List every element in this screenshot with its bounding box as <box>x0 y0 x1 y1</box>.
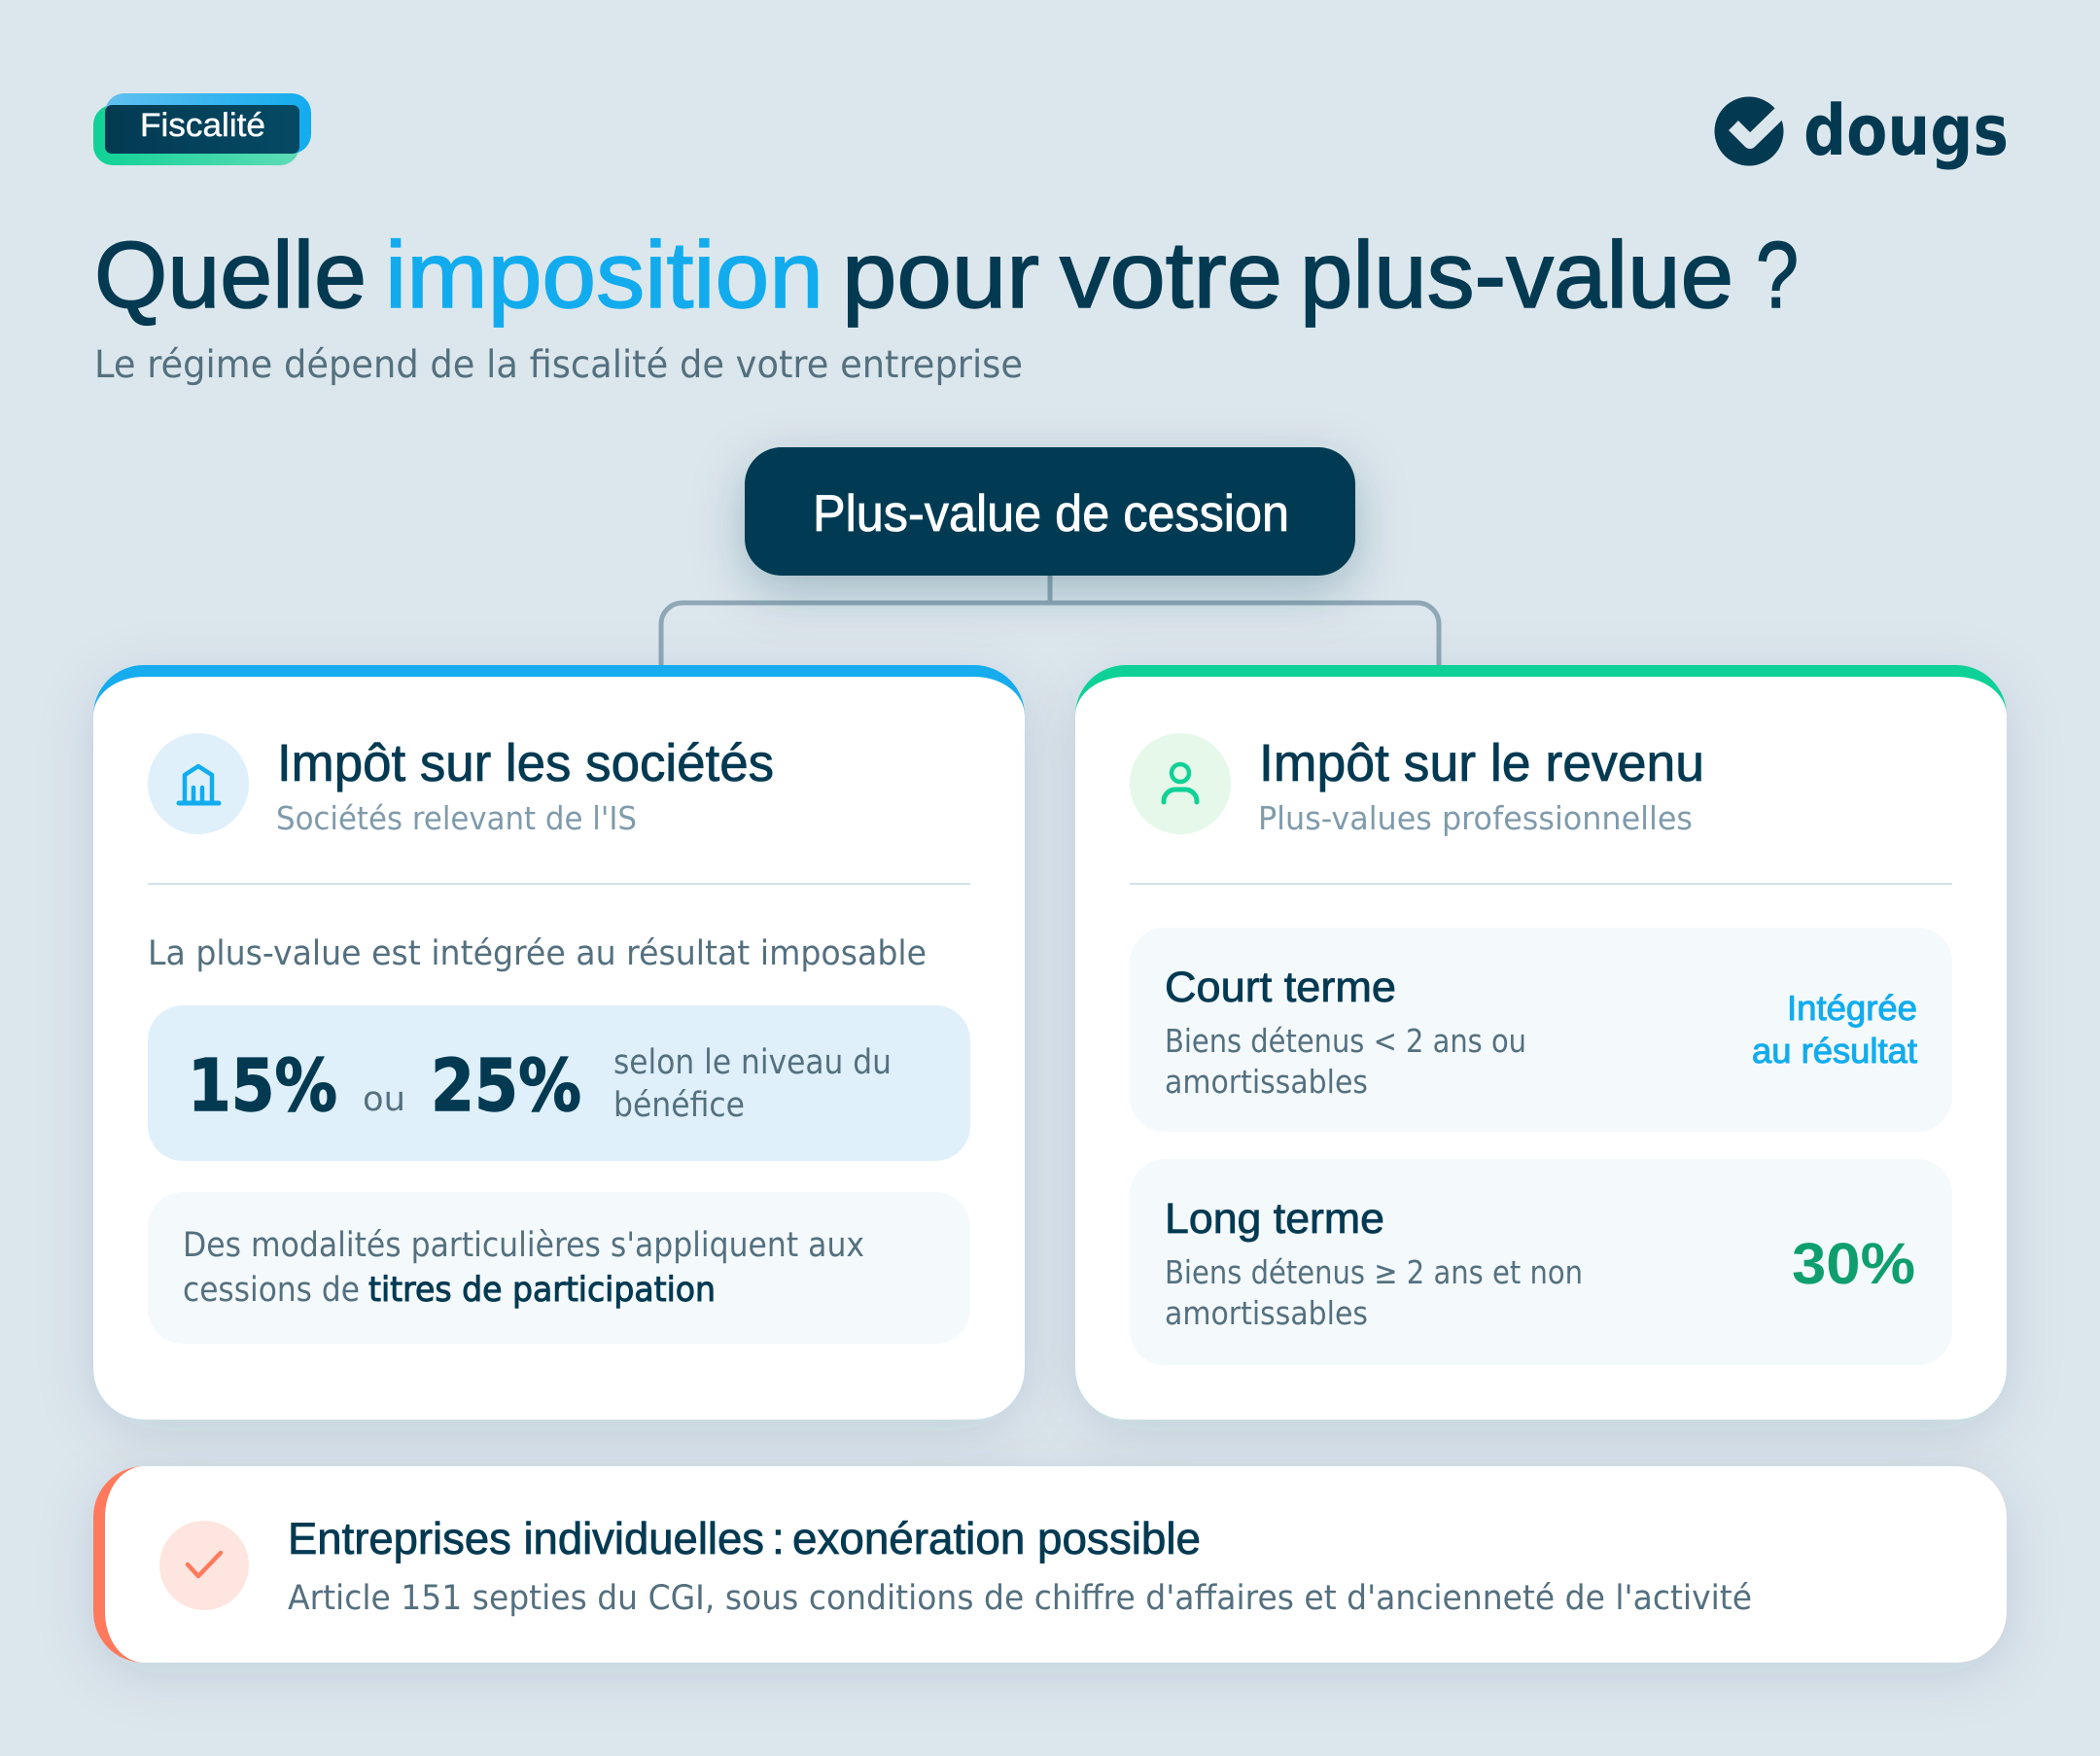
heading: exonération possible: exonération possible <box>792 1513 1201 1563</box>
title: imposition <box>385 222 823 328</box>
rate box: 15% ou 25% <box>148 1005 970 1161</box>
rate box: 15% ou 25%: ou <box>363 1080 405 1119</box>
text: intro: La plus-value est intégrée au résultat imposable <box>148 934 927 973</box>
badge: Fiscalité <box>93 93 311 165</box>
heading: exonération possible: Entreprises individuelles <box>288 1513 764 1563</box>
row: long terme: 30% <box>1792 1231 1915 1296</box>
title: Quelle <box>94 222 367 328</box>
rate box: 15% ou 25%: selon le niveau du <box>613 1043 892 1082</box>
title: pour <box>842 222 1039 328</box>
row: long terme: Biens détenus ≥ 2 ans et non <box>1165 1253 1583 1291</box>
title <box>94 222 1799 328</box>
note box: titres de participation: Des modalités particulières s'appliquent aux <box>183 1226 864 1265</box>
subheading: Sociétés relevant de l'IS: Sociétés relevant de l'IS <box>276 799 637 837</box>
row: long terme: amortissables <box>1165 1294 1368 1332</box>
logo: dougs <box>1715 89 2009 171</box>
title: ? <box>1756 222 1799 328</box>
subtitle: Le régime dépend de la fiscalité de votre entreprise <box>94 343 1023 387</box>
rate box: 15% ou 25%: 25% <box>431 1044 581 1128</box>
note box: titres de participation: cessions de <box>183 1271 360 1310</box>
heading: Impôt sur le revenu: Impôt sur le revenu <box>1259 734 1704 792</box>
note box: titres de participation <box>148 1192 970 1344</box>
connector between root node and cards <box>661 576 1439 665</box>
row: court terme <box>1130 928 1952 1132</box>
row: court terme: au résultat <box>1752 1031 1917 1071</box>
rate box: 15% ou 25%: 15% <box>188 1044 337 1128</box>
row: long terme: Long terme <box>1165 1195 1384 1243</box>
badge: Fiscalité: Fiscalité <box>140 107 265 144</box>
row: court terme: Intégrée <box>1787 988 1917 1028</box>
root node: Plus-value de cession <box>745 447 1355 576</box>
heading: Impôt sur les sociétés: Impôt sur les sociétés <box>277 734 774 792</box>
row: long terme <box>1130 1159 1952 1365</box>
rate box: 15% ou 25%: bénéfice <box>613 1086 745 1125</box>
panel: impôt sur les sociétés <box>93 665 1025 1420</box>
icon: building <box>148 733 249 834</box>
text: article 151 septies: Article 151 septies du CGI, sous conditions de chiffre d'affaires et d'ancienneté de l'activité <box>288 1579 1752 1618</box>
subheading: Plus-values professionnelles: Plus-values professionnelles <box>1258 799 1693 837</box>
root node: Plus-value de cession: Plus-value de cession <box>813 485 1289 543</box>
heading: exonération possible: : <box>772 1513 785 1563</box>
note box: titres de participation: titres de participation <box>368 1271 716 1310</box>
logo: dougs: dougs <box>1803 89 2009 171</box>
row: court terme: Biens détenus < 2 ans ou <box>1165 1022 1526 1060</box>
row: court terme: amortissables <box>1165 1063 1368 1101</box>
title: votre <box>1060 222 1282 328</box>
panel: impôt sur le revenu <box>1075 665 2007 1420</box>
icon: check <box>159 1521 249 1610</box>
icon: person <box>1130 733 1231 834</box>
title: plus-value <box>1300 222 1733 328</box>
row: court terme: Court terme <box>1165 964 1396 1011</box>
heading: exonération possible <box>288 1513 1201 1563</box>
panel: entreprises individuelles <box>93 1466 2007 1663</box>
